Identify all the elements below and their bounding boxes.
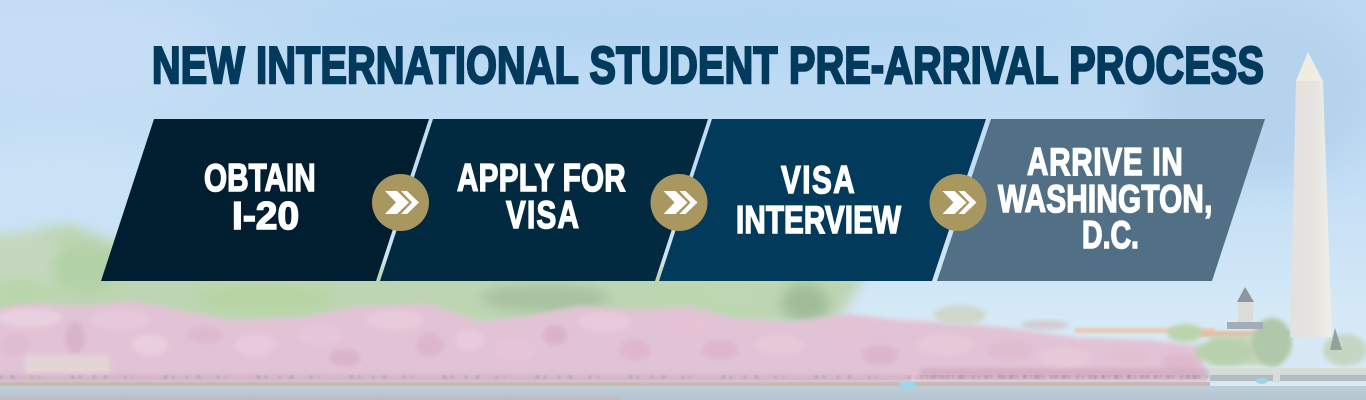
blossom texture	[0, 309, 1210, 381]
title: NEW INTERNATIONAL STUDENT PRE-ARRIVAL PROCESS	[152, 36, 1264, 94]
panel: step 3 visa interview: VISA	[781, 159, 855, 202]
panel: step 2 apply for visa: APPLY FOR	[457, 157, 626, 200]
arrow: step 2 to 3	[650, 174, 708, 231]
panel: step 3 visa interview: INTERVIEW	[736, 199, 901, 242]
green trees	[0, 224, 870, 330]
panel: step 1 obtain I-20: OBTAIN	[204, 157, 316, 200]
icon: Washington Monument	[1290, 52, 1342, 350]
distant buildings and trees, right	[934, 287, 1366, 366]
paddle boats	[899, 378, 1268, 390]
panel: step 4 arrive in Washington, D.C.: D.C.	[1082, 212, 1139, 257]
panel: step 1 obtain I-20: I-20	[232, 193, 299, 238]
panel: step 3 visa interview	[659, 119, 986, 281]
panel: step 4 arrive in Washington, D.C.	[937, 119, 1265, 281]
water	[0, 386, 1366, 400]
arrow: step 1 to 2	[372, 174, 429, 231]
shoreline	[0, 382, 1210, 386]
panel: step 2 apply for visa	[380, 119, 708, 281]
panel: step 4 arrive in Washington, D.C.: WASHINGTON,	[998, 178, 1212, 221]
bridge	[1210, 368, 1366, 382]
panel: step 2 apply for visa: VISA	[506, 194, 579, 237]
crowd along the shore	[0, 376, 1208, 378]
arrow: step 3 to 4	[930, 174, 986, 231]
panel: step 4 arrive in Washington, D.C.: ARRIVE IN	[1027, 141, 1183, 184]
cherry blossom band	[0, 301, 1208, 384]
panel: step 1 obtain I-20	[101, 119, 429, 281]
